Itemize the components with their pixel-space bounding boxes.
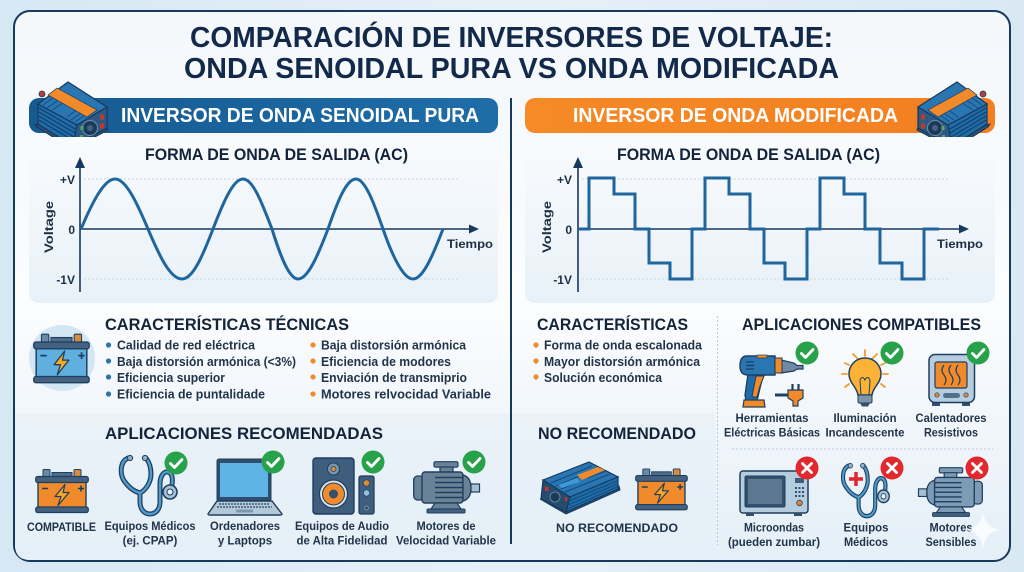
list: modified features (533, 338, 703, 385)
title: COMPARACIÓN DE INVERSORES DE VOLTAJE: (190, 20, 833, 54)
label: microondas (728, 522, 820, 549)
list: technical features blue (106, 338, 296, 402)
label: iluminación: Iluminación (834, 413, 896, 425)
panel: modified wave chart (525, 137, 995, 303)
label: motores de velocidad variable: Velocidad Variable (396, 536, 496, 548)
list: technical features orange: Baja distorsión armónica (321, 338, 467, 352)
sine wave (81, 179, 443, 279)
list: technical features orange: Eficiencia de modores (321, 355, 451, 369)
watermark sparkle (965, 512, 1001, 548)
label: herramientas: Herramientas (736, 413, 808, 425)
stepped wave (578, 178, 939, 279)
axis labels: Voltage (42, 201, 56, 253)
icon: motor recommended (414, 450, 486, 513)
panel: sine chart (29, 137, 498, 303)
list: technical features orange (310, 338, 491, 402)
chart title left: FORMA DE ONDA DE SALIDA (AC) (145, 146, 408, 164)
title: ONDA SENOIDAL PURA VS ONDA MODIFICADA (184, 53, 839, 85)
label: equipos médicos no (844, 522, 888, 549)
axes (80, 166, 472, 292)
axis labels: +V (557, 173, 572, 187)
heading: características técnicas: CARACTERÍSTICAS TÉCNICAS (105, 315, 349, 334)
icon: microwave (740, 456, 818, 516)
icon: heater (929, 342, 990, 406)
vertical dotted divider (716, 316, 718, 545)
icon: blue battery (29, 325, 95, 391)
axis labels: 0 (68, 223, 75, 237)
label: iluminación (826, 413, 904, 440)
axes (578, 166, 962, 292)
icon: inverter left (35, 82, 108, 149)
heading: aplicaciones compatibles: APLICACIONES COMPATIBLES (742, 315, 981, 334)
icon: orange battery not recommended (636, 469, 687, 510)
list: modified features: Forma de onda escalonada (544, 338, 703, 352)
label: equipos de audio: de Alta Fidelidad (296, 536, 388, 548)
label: calentadores (916, 413, 986, 440)
label: equipos de audio (295, 521, 389, 548)
label: motores de velocidad variable (396, 521, 496, 548)
label: ordenadores (210, 521, 280, 548)
label: equipos médicos: (ej. CPAP) (123, 536, 178, 548)
label: microondas: Microondas (744, 522, 804, 534)
label: motores sensibles: Sensibles (926, 537, 976, 549)
right banner: INVERSOR DE ONDA MODIFICADA (573, 105, 898, 127)
axis arrows (75, 157, 479, 234)
list: technical features blue: Eficiencia superior (117, 371, 225, 385)
label: microondas: (pueden zumbar) (728, 537, 820, 549)
list: technical features blue: Baja distorsión armónica (<3%) (117, 355, 296, 369)
right banner (525, 98, 995, 133)
lower section band (15, 413, 715, 560)
icon: inverter right (917, 82, 990, 149)
axis labels: 0 (565, 223, 572, 237)
icon: motor not recommended (918, 456, 988, 516)
label: equipos médicos: Equipos Médicos (104, 521, 196, 533)
label: calentadores: Resistivos (924, 428, 978, 440)
icon: stethoscope recommended (121, 452, 188, 514)
label: equipos médicos (104, 521, 196, 548)
icon: light bulb (842, 342, 904, 406)
center divider (510, 98, 512, 544)
list: modified features: Solución económica (544, 371, 663, 385)
icon: laptop (208, 450, 284, 515)
label: herramientas (724, 413, 820, 440)
axis labels: Tiempo (937, 237, 983, 251)
axis labels: -1V (553, 273, 572, 287)
axis labels (540, 173, 983, 287)
label: equipos médicos no: Equipos (844, 522, 888, 534)
label: compatible: COMPATIBLE (27, 522, 96, 534)
axis labels: +V (60, 173, 75, 187)
label: motores sensibles: Motores (930, 522, 972, 534)
label: ordenadores: Ordenadores (210, 521, 280, 533)
label: calentadores: Calentadores (916, 413, 986, 425)
label: motores sensibles (926, 522, 976, 549)
label: herramientas: Eléctricas Básicas (724, 428, 820, 440)
list: modified features: Mayor distorsión armónica (544, 355, 701, 369)
axis labels: Voltage (540, 201, 554, 253)
axis labels: Tiempo (447, 237, 493, 251)
icon: orange battery compatible (36, 470, 88, 512)
icon: stethoscope not recommended (843, 456, 904, 516)
label: no recomendado: NO RECOMENDADO (556, 521, 678, 535)
list: technical features blue: Calidad de red eléctrica (117, 338, 256, 352)
heading: aplicaciones recomendadas: APLICACIONES RECOMENDADAS (105, 424, 383, 443)
axis labels: -1V (56, 273, 75, 287)
list: technical features blue: Eficiencia de puntalidade (117, 388, 265, 402)
label: iluminación: Incandescente (826, 428, 904, 440)
chart title right: FORMA DE ONDA DE SALIDA (AC) (617, 146, 880, 164)
title (184, 20, 839, 85)
label: equipos de audio: Equipos de Audio (295, 521, 389, 533)
icon: speakers (313, 450, 384, 514)
heading: no recomendado: NO RECOMENDADO (538, 424, 696, 443)
list: technical features orange: Motores relvocidad Variable (321, 388, 491, 402)
label: ordenadores: y Laptops (218, 536, 272, 548)
heading: características: CARACTERÍSTICAS (537, 315, 688, 334)
list: technical features orange: Enviación de transmiprio (321, 371, 467, 385)
axis labels (42, 173, 493, 287)
axis arrows (573, 157, 969, 234)
icon: drill (740, 342, 818, 407)
left banner: INVERSOR DE ONDA SENOIDAL PURA (121, 105, 479, 127)
left banner (29, 98, 498, 133)
label: motores de velocidad variable: Motores de (416, 521, 476, 533)
label: equipos médicos no: Médicos (844, 537, 888, 549)
icon: flat inverter (540, 462, 620, 514)
horizontal dotted divider (732, 448, 993, 450)
